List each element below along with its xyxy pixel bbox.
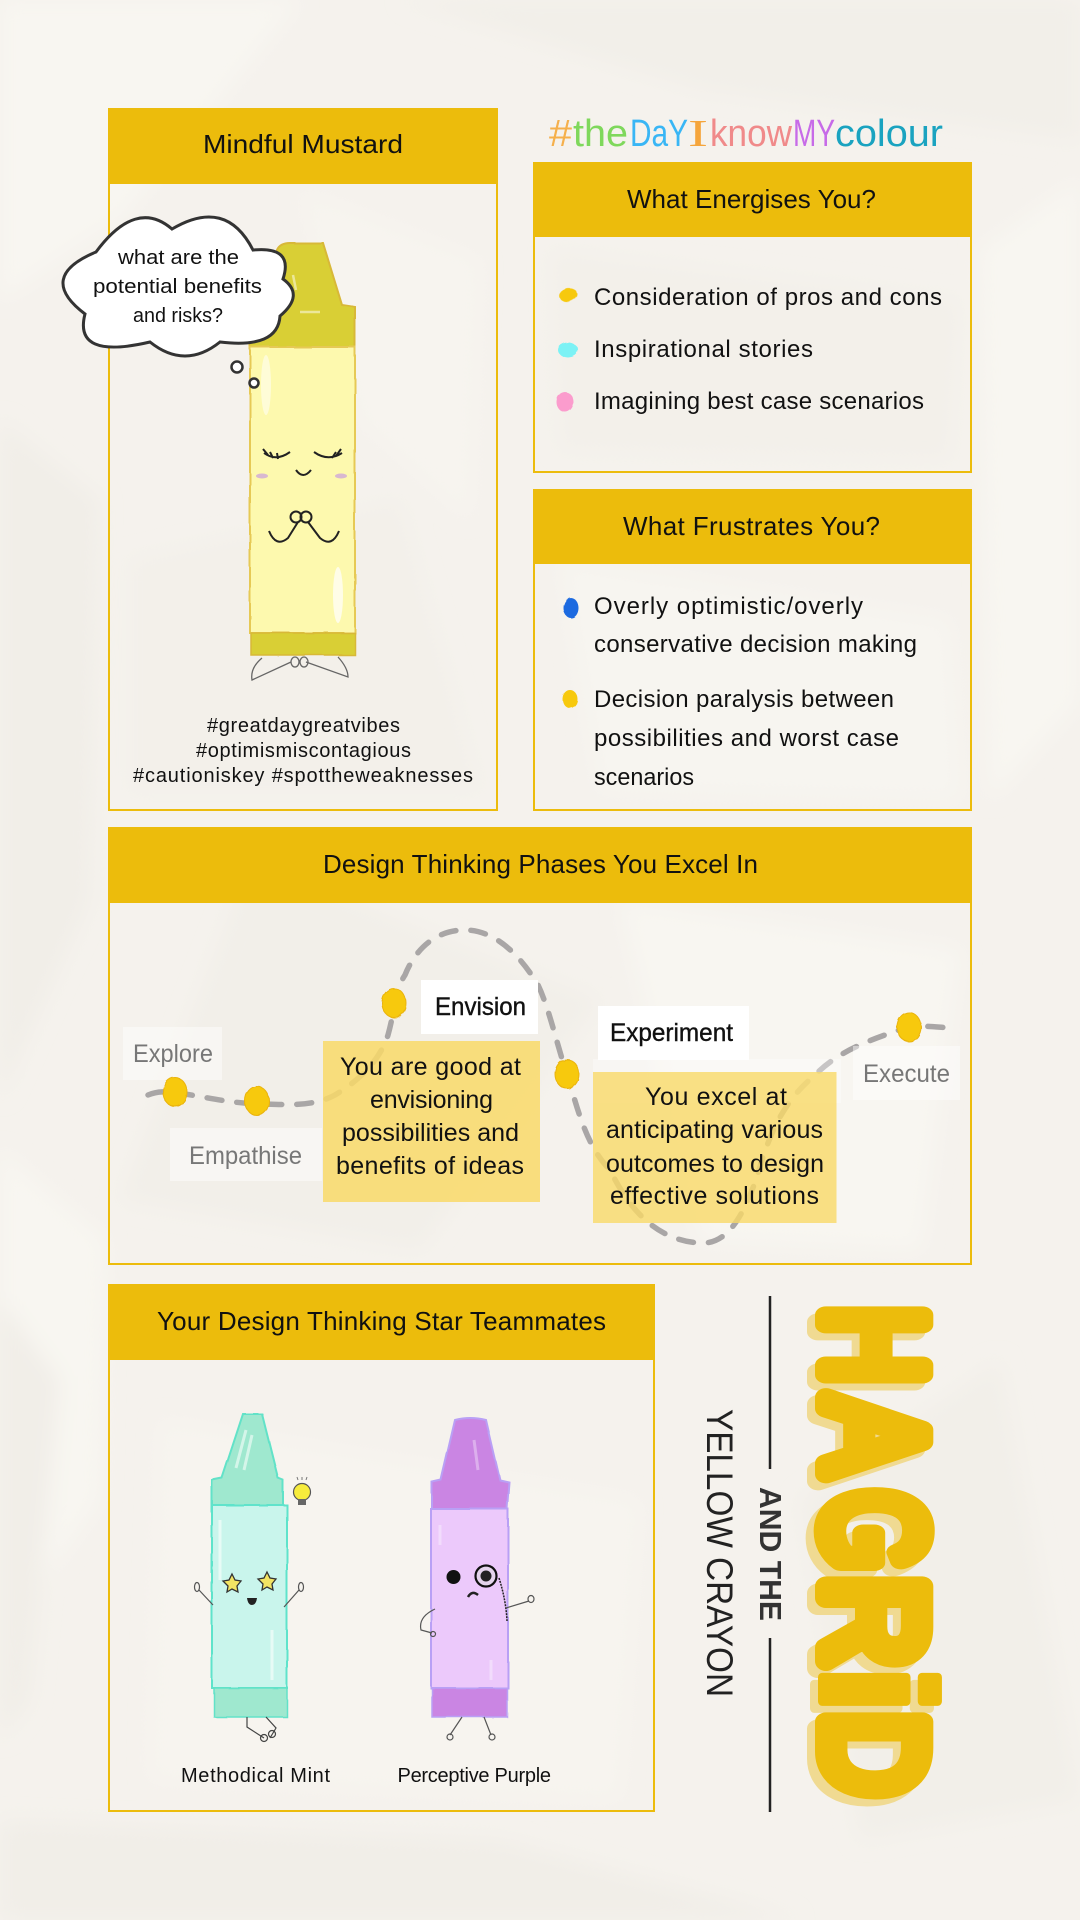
thought bubble: potential benefits <box>93 276 262 298</box>
callout: envisioning <box>323 1041 540 1202</box>
list item: decision paralysis: Decision paralysis between <box>594 686 894 713</box>
heading: What Energises You: What Energises You? <box>627 184 876 214</box>
list item: decision paralysis: scenarios <box>594 764 694 791</box>
title hashtag: colour <box>835 113 943 155</box>
title: HAGRID: R <box>796 1576 952 1667</box>
bullet: yellow <box>558 286 578 304</box>
panel: What Frustrates You <box>533 489 972 810</box>
panel header: Mindful Mustard <box>108 108 498 184</box>
title: HAGRID: A <box>788 1404 943 1482</box>
label: Envision <box>421 980 538 1034</box>
heading: What Frustrates You: What Frustrates You? <box>623 511 880 541</box>
panel: Mindful Mustard <box>63 108 498 810</box>
title: HAGRID: i <box>788 1665 967 1714</box>
callout: envisioning: envisioning <box>370 1086 493 1114</box>
list item: decision paralysis: possibilities and worst case <box>594 725 899 752</box>
side rule: bottom <box>769 1638 771 1812</box>
title hashtag: I <box>688 113 708 155</box>
panel: What Energises You <box>533 162 972 472</box>
title hashtag: # <box>549 113 572 155</box>
label: Experiment: Experiment <box>610 1019 733 1047</box>
subtitle: AND THE: AND THE <box>753 1487 788 1621</box>
callout: anticipating outcomes: effective solutions <box>610 1182 819 1210</box>
label: Explore: Explore <box>133 1040 213 1068</box>
icon: light bulb <box>294 1477 310 1505</box>
callout: envisioning: You are good at <box>340 1053 521 1081</box>
title: HAGRID: R <box>788 1583 944 1674</box>
bullet: cyan <box>558 342 578 358</box>
panel: Design Thinking Phases <box>108 827 972 1264</box>
label: Explore <box>123 1027 222 1080</box>
list item: pros and cons: Consideration of pros and cons <box>594 284 942 311</box>
list item: decision making <box>594 593 917 658</box>
label: Methodical Mint: Methodical Mint <box>181 1765 330 1787</box>
bullet: yellow <box>562 690 578 708</box>
callout: anticipating outcomes <box>593 1072 836 1223</box>
heading: Mindful Mustard: Mindful Mustard <box>203 129 403 159</box>
title hashtag: know <box>710 113 793 155</box>
label: Perceptive Purple: Perceptive Purple <box>398 1765 551 1787</box>
title: HAGRID: i <box>780 1672 959 1721</box>
dashed journey path <box>148 930 957 1243</box>
hashtags: #cautioniskey #spottheweaknesses <box>133 765 473 787</box>
faint box <box>593 1059 841 1103</box>
hashtags: #greatdaygreatvibes <box>207 715 400 737</box>
crayon: Methodical Mint <box>194 1414 304 1742</box>
subtitle: YELLOW CRAYON: YELLOW CRAYON <box>699 1409 740 1697</box>
bullet: blue <box>564 598 578 618</box>
panel header: teammates <box>108 1284 655 1360</box>
title: HAGRID: H <box>788 1313 943 1391</box>
panel header: frustrates <box>533 489 972 564</box>
label: Empathise: Empathise <box>189 1142 302 1170</box>
callout: anticipating outcomes: anticipating various <box>606 1116 823 1144</box>
callout: anticipating outcomes: You excel at <box>645 1083 787 1111</box>
title: HAGRID: G <box>795 1490 951 1571</box>
title: HAGRID: D <box>788 1719 943 1803</box>
crayon: mustard character <box>250 243 355 680</box>
callout: anticipating outcomes: outcomes to design <box>606 1150 824 1178</box>
side rule: top <box>769 1296 771 1469</box>
callout: envisioning: benefits of ideas <box>336 1152 524 1180</box>
thought bubble: and risks? <box>133 305 223 327</box>
label: Execute <box>853 1046 960 1100</box>
phase markers <box>163 988 921 1116</box>
label: Execute: Execute <box>863 1060 950 1088</box>
panel: Star Teammates <box>108 1284 655 1811</box>
heading: Star Teammates: Your Design Thinking Star Teammates <box>157 1306 606 1336</box>
title: HAGRID: G <box>787 1497 943 1578</box>
thought bubble <box>63 217 293 388</box>
title: HAGRID <box>780 1306 967 1803</box>
title: HAGRID: D <box>796 1712 951 1796</box>
hashtags <box>133 715 473 787</box>
crayon: Perceptive Purple <box>421 1418 534 1740</box>
title: HAGRID: H <box>796 1306 951 1384</box>
title hashtag: MY <box>793 113 835 155</box>
title hashtag: the <box>573 113 628 155</box>
label: Experiment <box>598 1006 749 1060</box>
title: HAGRID: A <box>796 1397 951 1475</box>
heading: Design Thinking Phases: Design Thinking Phases You Excel In <box>323 849 758 879</box>
list item: best case scenarios: Imagining best case scenarios <box>594 388 924 415</box>
title hashtag <box>549 113 943 155</box>
panel header: phases <box>108 827 972 903</box>
list item: decision making: Overly optimistic/overly <box>594 593 863 620</box>
title hashtag: DaY <box>630 113 688 155</box>
bullet: pink <box>556 392 574 412</box>
label: Empathise <box>170 1128 322 1181</box>
list item: inspirational stories: Inspirational stories <box>594 336 813 363</box>
hashtags: #optimismiscontagious <box>196 740 411 762</box>
list item: decision paralysis <box>594 686 899 791</box>
thought bubble: what are the <box>117 247 239 269</box>
label: Envision: Envision <box>435 993 526 1021</box>
callout: envisioning: possibilities and <box>342 1119 519 1147</box>
panel header: energises <box>533 162 972 237</box>
list item: decision making: conservative decision making <box>594 631 917 658</box>
